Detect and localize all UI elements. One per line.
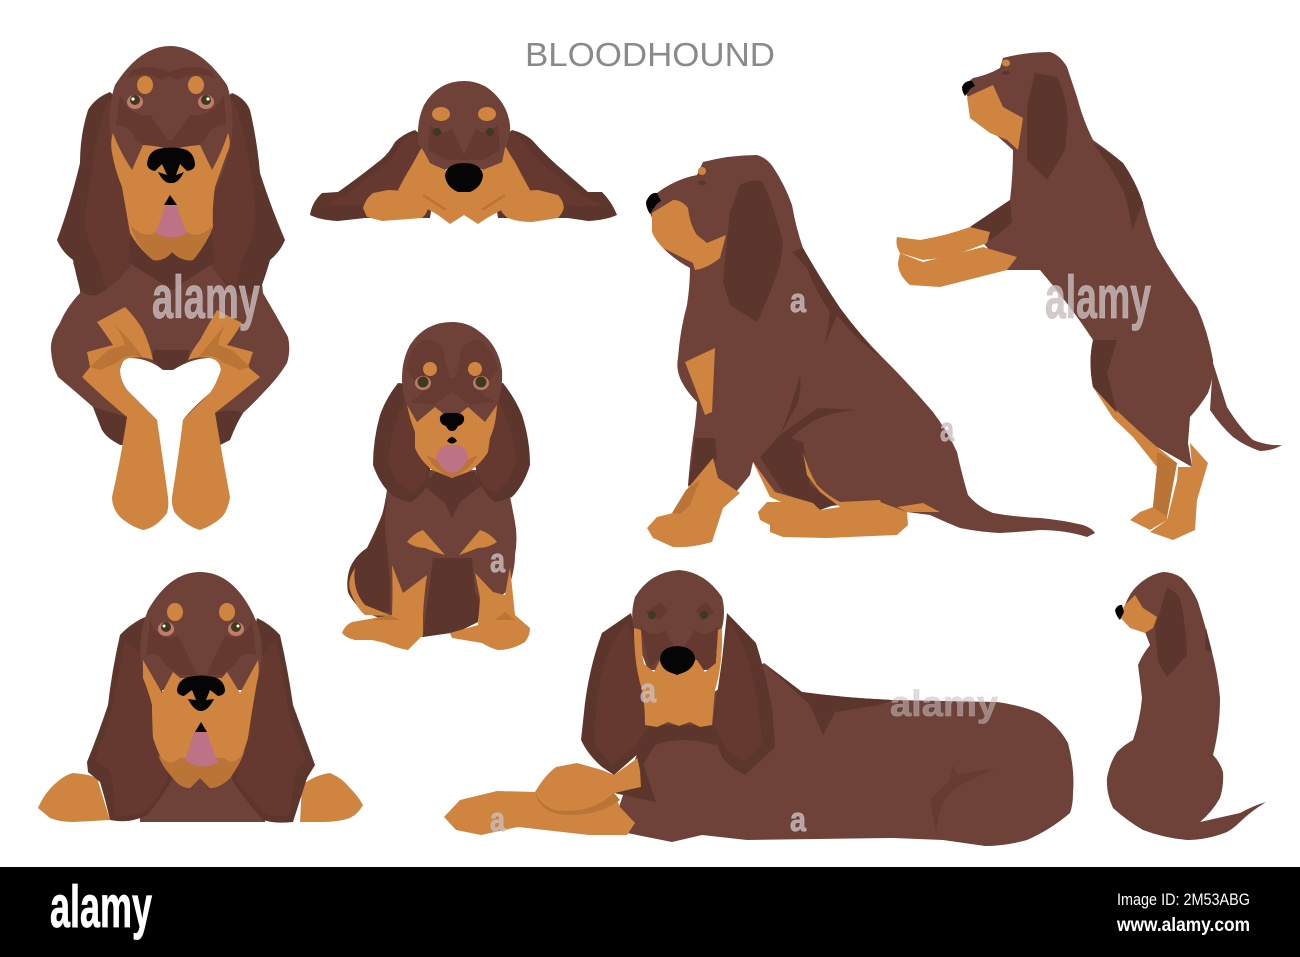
dog: flat head with spread ears [310, 81, 617, 224]
dog: lying front view [51, 46, 289, 530]
footer url: www.alamy.com [1116, 915, 1250, 936]
footer logo: alamy [50, 874, 152, 940]
watermarks [152, 264, 1151, 839]
footer image id: Image ID: 2M53ABG [1117, 890, 1250, 909]
watermarks: alamy [152, 264, 260, 331]
watermarks: alamy [1045, 264, 1151, 331]
watermarks: a [790, 282, 807, 320]
dog: sitting side view [646, 155, 1095, 547]
watermarks: a [490, 542, 506, 580]
dog: front head with paws [38, 572, 363, 823]
watermarks: a [640, 672, 657, 710]
dog: puppy sitting front view [342, 322, 530, 650]
watermarks: a [490, 801, 506, 839]
watermarks: alamy [890, 683, 998, 724]
watermarks: a [940, 411, 955, 449]
dog: lying side view [444, 570, 1073, 846]
watermarks: a [790, 801, 807, 839]
title: BLOODHOUND [525, 36, 775, 73]
footer bar [0, 867, 1300, 957]
dog: small sitting from behind [1107, 572, 1266, 840]
dog: standing on hind legs [896, 52, 1282, 540]
